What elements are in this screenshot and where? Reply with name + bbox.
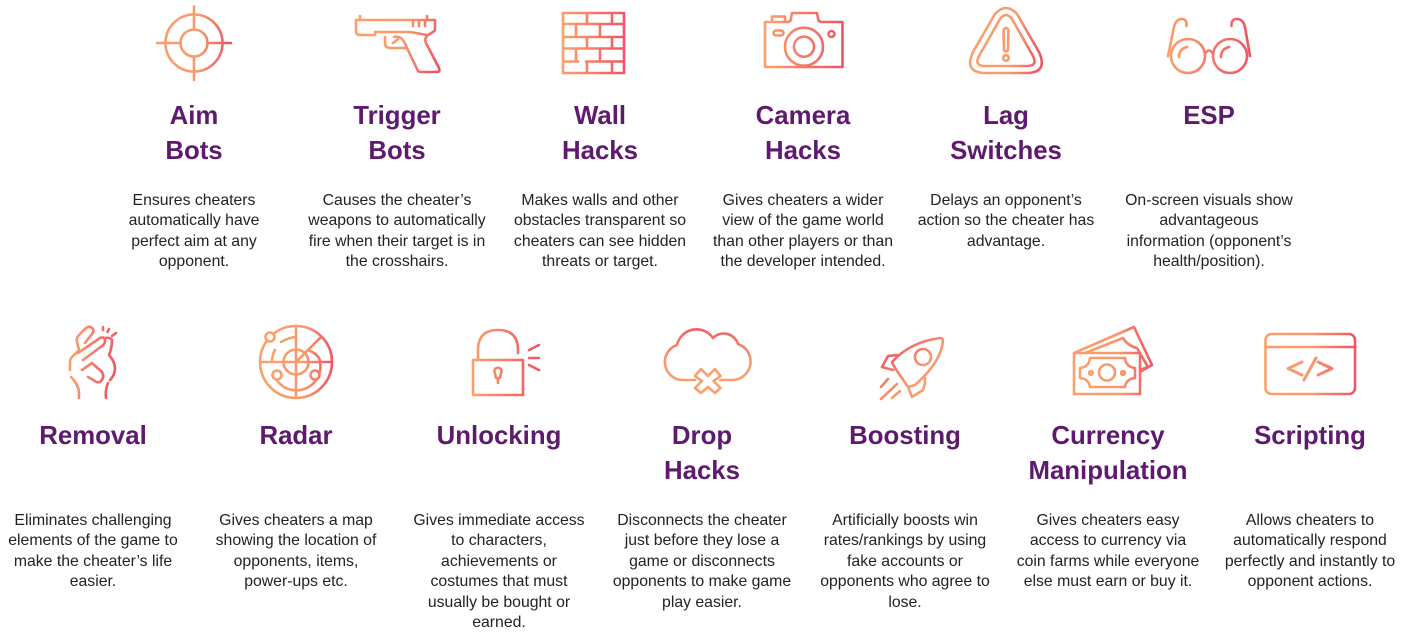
text: Trigger Bots: Causes the cheater’s bbox=[323, 192, 471, 209]
text: Boosting bbox=[820, 512, 990, 611]
text: Radar bbox=[216, 512, 376, 590]
text: ESP: On-screen visuals show bbox=[1125, 192, 1293, 209]
text: Currency Manipulation: access to currency via bbox=[1030, 532, 1186, 549]
heading: Lag Switches: Lag bbox=[983, 102, 1029, 130]
heading: Lag Switches: Switches bbox=[950, 136, 1062, 164]
text: Radar: Gives cheaters a map bbox=[219, 512, 373, 529]
text: Drop Hacks: Disconnects the cheater bbox=[617, 512, 787, 529]
text: Trigger Bots bbox=[308, 192, 486, 270]
icon: fingers crossed hand bbox=[70, 327, 116, 398]
text: Currency Manipulation bbox=[1017, 512, 1199, 590]
text: Radar: opponents, items, bbox=[234, 553, 358, 570]
text: Currency Manipulation: else must earn or buy it. bbox=[1024, 573, 1192, 590]
text: Aim Bots: opponent. bbox=[159, 253, 229, 270]
text: Lag Switches: advantage. bbox=[967, 233, 1045, 250]
text: Camera Hacks: view of the game world bbox=[722, 212, 884, 229]
text: Boosting: Artificially boosts win bbox=[832, 512, 978, 529]
text: Drop Hacks bbox=[613, 512, 791, 611]
heading: Drop Hacks: Hacks bbox=[664, 456, 740, 484]
text: Currency Manipulation: Gives cheaters easy bbox=[1036, 512, 1180, 529]
text: Removal: easier. bbox=[70, 573, 116, 590]
text: Wall Hacks: cheaters can see hidden bbox=[514, 233, 686, 250]
text: Aim Bots: Ensures cheaters bbox=[133, 192, 255, 209]
text: Trigger Bots: the crosshairs. bbox=[346, 253, 448, 270]
text: Boosting: rates/rankings by using bbox=[824, 532, 986, 549]
text: Unlocking bbox=[413, 512, 585, 631]
heading: Aim Bots bbox=[165, 102, 223, 164]
text: Lag Switches bbox=[918, 192, 1094, 250]
heading: Camera Hacks bbox=[756, 102, 850, 164]
text: Scripting: perfectly and instantly to bbox=[1225, 553, 1395, 570]
text: Scripting: automatically respond bbox=[1233, 532, 1387, 549]
heading: Wall Hacks: Hacks bbox=[562, 136, 638, 164]
icon: warning triangle bbox=[970, 8, 1042, 73]
heading: Currency Manipulation: Manipulation bbox=[1028, 456, 1188, 484]
heading: Boosting: Boosting bbox=[849, 422, 961, 450]
text: Boosting: lose. bbox=[888, 594, 922, 611]
text: Unlocking: usually be bought or bbox=[428, 594, 570, 611]
text: ESP: health/position). bbox=[1153, 253, 1265, 270]
heading: Scripting: Scripting bbox=[1254, 422, 1366, 450]
heading: Lag Switches bbox=[950, 102, 1062, 164]
icon: brick wall bbox=[563, 13, 624, 73]
text: ESP bbox=[1125, 192, 1293, 270]
text: Removal bbox=[8, 512, 178, 590]
text: Camera Hacks: the developer intended. bbox=[720, 253, 886, 270]
heading: Camera Hacks: Camera bbox=[756, 102, 850, 130]
text: Unlocking: Gives immediate access bbox=[413, 512, 585, 529]
icon: banknotes bbox=[1074, 327, 1152, 394]
heading: Unlocking: Unlocking bbox=[437, 422, 561, 450]
text: Trigger Bots: weapons to automatically bbox=[308, 212, 486, 229]
text: Aim Bots bbox=[129, 192, 259, 270]
text: Scripting: Allows cheaters to bbox=[1246, 512, 1374, 529]
heading: Removal: Removal bbox=[39, 422, 147, 450]
text: Scripting: opponent actions. bbox=[1248, 573, 1372, 590]
heading: Aim Bots: Aim bbox=[170, 102, 218, 130]
text: Trigger Bots: fire when their target is in bbox=[309, 233, 485, 250]
heading: Trigger Bots: Bots bbox=[368, 136, 426, 164]
heading: Radar: Radar bbox=[259, 422, 333, 450]
text: Removal: elements of the game to bbox=[8, 532, 178, 549]
icon: pistol bbox=[356, 16, 439, 72]
text: Boosting: opponents who agree to bbox=[820, 573, 990, 590]
text: Aim Bots: automatically have bbox=[129, 212, 259, 229]
heading: Aim Bots: Bots bbox=[165, 136, 223, 164]
icon: cloud with x bbox=[665, 329, 751, 393]
text: Drop Hacks: opponents to make game bbox=[613, 573, 791, 590]
text: Wall Hacks: Makes walls and other bbox=[521, 192, 679, 209]
icon: camera bbox=[765, 13, 842, 67]
text: Wall Hacks bbox=[514, 192, 686, 270]
text: Camera Hacks: Gives cheaters a wider bbox=[723, 192, 883, 209]
text: ESP: advantageous bbox=[1159, 212, 1259, 229]
heading: Wall Hacks: Wall bbox=[574, 102, 626, 130]
text: Boosting: fake accounts or bbox=[847, 553, 963, 570]
text: Wall Hacks: obstacles transparent so bbox=[514, 212, 686, 229]
text: Removal: make the cheater’s life bbox=[14, 553, 172, 570]
heading: Drop Hacks bbox=[664, 422, 740, 484]
icon: crosshair bbox=[157, 6, 231, 80]
heading: ESP: ESP bbox=[1183, 102, 1235, 130]
heading: Currency Manipulation: Currency bbox=[1051, 422, 1165, 450]
icon: rocket bbox=[881, 338, 943, 399]
text: Camera Hacks bbox=[713, 192, 893, 270]
heading: Drop Hacks: Drop bbox=[672, 422, 732, 450]
text: ESP: information (opponent’s bbox=[1127, 233, 1291, 250]
icon: code window bbox=[1266, 334, 1355, 394]
text: Removal: Eliminates challenging bbox=[14, 512, 172, 529]
text: Unlocking: to characters, bbox=[451, 532, 547, 549]
text: Drop Hacks: game or disconnects bbox=[629, 553, 775, 570]
text: Scripting bbox=[1225, 512, 1395, 590]
text: Radar: showing the location of bbox=[216, 532, 376, 549]
icon: glasses bbox=[1168, 19, 1250, 73]
icon: open padlock bbox=[473, 330, 539, 395]
heading: Currency Manipulation bbox=[1028, 422, 1188, 484]
text: Drop Hacks: just before they lose a bbox=[625, 532, 779, 549]
text: Drop Hacks: play easier. bbox=[662, 594, 742, 611]
text: Camera Hacks: than other players or than bbox=[713, 233, 893, 250]
icon: radar bbox=[260, 326, 332, 398]
text: Lag Switches: action so the cheater has bbox=[918, 212, 1094, 229]
heading: Trigger Bots: Trigger bbox=[353, 102, 441, 130]
text: Lag Switches: Delays an opponent’s bbox=[930, 192, 1082, 209]
text: Unlocking: earned. bbox=[472, 614, 526, 631]
text: Unlocking: costumes that must bbox=[431, 573, 567, 590]
text: Wall Hacks: threats or target. bbox=[542, 253, 658, 270]
text: Radar: power-ups etc. bbox=[244, 573, 348, 590]
heading: Wall Hacks bbox=[562, 102, 638, 164]
text: Aim Bots: perfect aim at any bbox=[131, 233, 257, 250]
heading: Trigger Bots bbox=[353, 102, 441, 164]
text: Unlocking: achievements or bbox=[441, 553, 557, 570]
text: Currency Manipulation: coin farms while everyone bbox=[1017, 553, 1199, 570]
heading: Camera Hacks: Hacks bbox=[765, 136, 841, 164]
